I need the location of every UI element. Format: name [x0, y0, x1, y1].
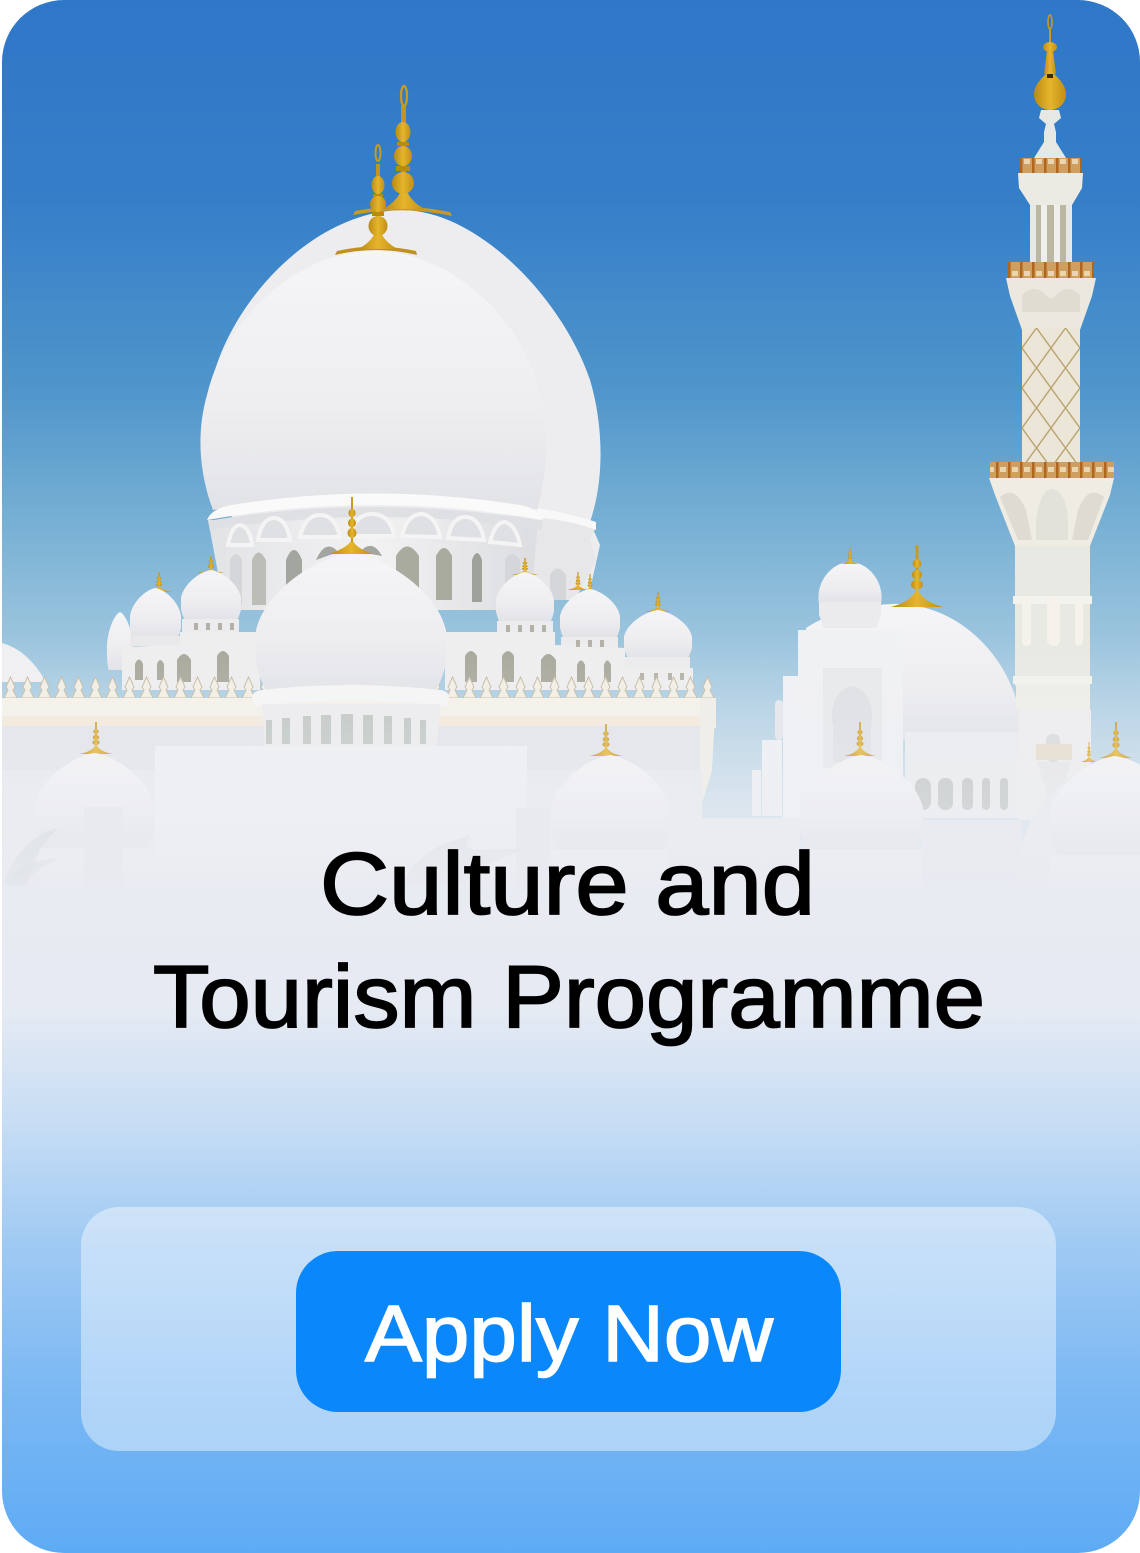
small domes upper tier — [2, 556, 693, 682]
crenellated terrace — [2, 676, 716, 832]
main domes and drums — [200, 86, 601, 610]
apply now button — [296, 1251, 841, 1412]
minaret second balcony — [1006, 262, 1096, 330]
minaret lattice shaft — [1022, 328, 1080, 466]
back finial — [353, 86, 452, 216]
back large dome — [215, 210, 601, 590]
minaret gold finial — [1034, 15, 1066, 110]
drum windows — [230, 546, 566, 605]
title line 2: Tourism Programme — [153, 947, 985, 1046]
front large dome — [200, 366, 542, 510]
image fade to pale — [2, 680, 1140, 885]
soft lower band — [2, 885, 1140, 893]
lower wall and domes — [27, 722, 642, 867]
far right domes — [1027, 722, 1140, 832]
front drum — [208, 520, 538, 610]
photo: grand mosque with fading base — [2, 15, 1140, 886]
drum arches — [228, 514, 520, 545]
minaret third balcony — [989, 462, 1114, 546]
central front dome — [252, 497, 449, 746]
minaret — [989, 15, 1114, 820]
right side domed hall — [702, 545, 1022, 832]
minaret lower tower — [1013, 546, 1092, 820]
back drum — [566, 529, 595, 600]
side blocks with windows — [122, 623, 693, 690]
button label: Apply Now — [365, 1289, 773, 1378]
front finial — [335, 145, 417, 255]
minaret upper white tip — [1034, 110, 1066, 158]
central dome finial — [329, 497, 373, 554]
title — [153, 834, 985, 1046]
call to action panel — [81, 1207, 1056, 1451]
minaret top gallery — [1018, 158, 1083, 263]
title line 1: Culture and — [320, 834, 815, 933]
